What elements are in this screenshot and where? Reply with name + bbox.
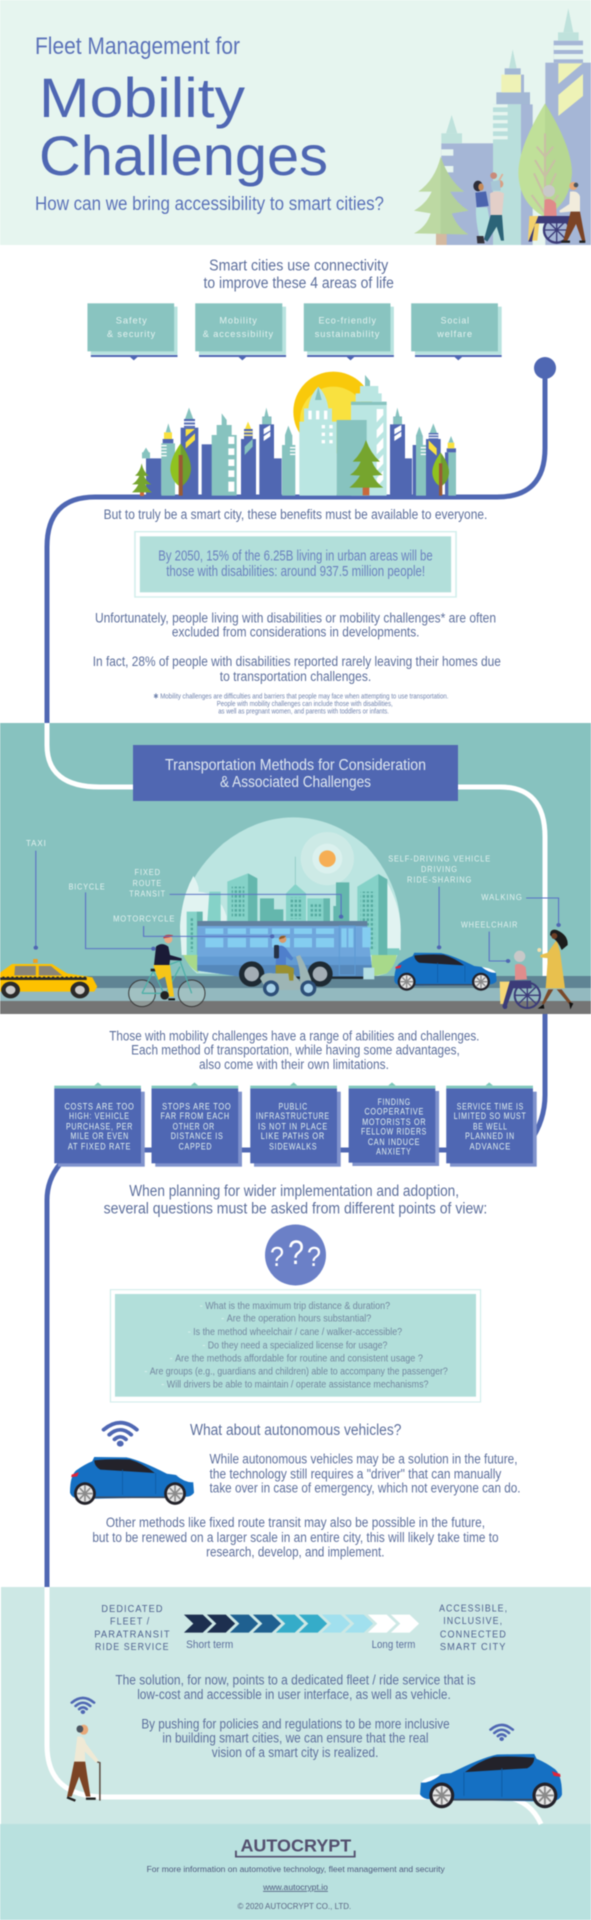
callout: 2050 statistic: By 2050, 15% of the 6.25B living in urban areas will be (158, 548, 433, 564)
text: exclusion paragraphs: to transportation challenges. (220, 670, 371, 685)
chart labels: transport method leaders (26, 839, 561, 963)
logo: AUTOCRYPT (240, 1835, 352, 1855)
label: taxi: TAXI (26, 839, 47, 848)
paragraph: other methods: research, develop, and implement. (206, 1545, 384, 1560)
card: infrastructure: LIKE PATHS OR (261, 1132, 325, 1142)
card: mobility and accessibility: Mobility (219, 316, 258, 326)
card: infrastructure: INFRASTRUCTURE (256, 1112, 330, 1122)
icon: question marks circle (265, 1224, 326, 1286)
paragraph: other methods (92, 1516, 499, 1560)
card: costs: COSTS ARE TOO (64, 1102, 135, 1112)
text: exclusion paragraphs (93, 611, 501, 685)
label: fixed route transit: FIXED (135, 868, 161, 877)
heading: planning questions: When planning for wider implementation and adoption, (129, 1183, 459, 1200)
text: abilities and limitations: Each method of transportation, while having some advantages, (131, 1043, 460, 1058)
card: eco-friendly sustainability: sustainability (315, 330, 380, 340)
tree: small pine (132, 463, 152, 496)
panel: transportation background (0, 723, 591, 1014)
person: woman (473, 181, 491, 243)
text: solution paragraphs: By pushing for policies and regulations to be more inclusive (141, 1717, 450, 1732)
heading: planning questions (104, 1183, 487, 1217)
road bands (0, 976, 591, 1014)
person: woman in wheelchair (528, 185, 570, 243)
tree: leaf tree right (432, 452, 449, 496)
icon: question marks circle: ? (288, 1234, 304, 1272)
axis labels: Short term (186, 1640, 233, 1651)
card: service time: LIMITED SO MUST (454, 1112, 527, 1122)
route line: blue upper section with start dot (47, 357, 556, 723)
label: smart city (439, 1604, 508, 1653)
panel: solution background (1, 1587, 591, 1824)
card: safety and security: & security (107, 330, 156, 340)
card: service time: ADVANCE (470, 1142, 511, 1152)
copyright: © 2020 AUTOCRYPT CO., LTD. (237, 1902, 351, 1911)
panel: question list: - Is the method wheelchair / cane / walker-accessible? (188, 1327, 402, 1338)
text: solution paragraphs (115, 1673, 476, 1761)
heading: transportation methods banner: Transportation Methods for Consideration (165, 757, 426, 774)
panel: four areas of life (87, 303, 502, 360)
illustration: taxi (0, 959, 97, 998)
label: dedicated fleet: FLEET / (110, 1617, 150, 1627)
card: eco-friendly sustainability: Eco-friendly (318, 316, 377, 326)
card: costs: PURCHASE, PER (66, 1122, 133, 1132)
illustration: elderly man with cane and wifi (67, 1698, 100, 1801)
heading: planning questions: several questions must be asked from different points of view: (104, 1200, 487, 1217)
label: fixed route transit (129, 868, 343, 919)
label: wheelchair (461, 920, 518, 963)
card: social welfare: welfare (436, 330, 473, 340)
panel: question list: - What is the maximum trip distance & duration? (200, 1301, 390, 1312)
paragraph: driver requirement: the technology still requires a "driver" that can manually (210, 1467, 502, 1482)
header title block (35, 33, 384, 215)
footer: logo and contact (147, 1835, 445, 1911)
callout: 2050 statistic (135, 532, 456, 597)
card: stops: CAPPED (179, 1142, 212, 1152)
card: costs (54, 1082, 145, 1167)
card: anxiety: COOPERATIVE (364, 1107, 424, 1117)
illustration: autonomous car (70, 1457, 194, 1505)
bus (197, 921, 374, 987)
card: safety and security (87, 303, 178, 360)
label: dedicated fleet: PARATRANSIT (94, 1630, 171, 1640)
text: intro heading: Smart cities use connectivity (209, 258, 389, 274)
text: solution paragraphs: vision of a smart city is realized. (212, 1746, 378, 1761)
person: man carrying child (484, 172, 504, 242)
text: autonomous vehicles section (92, 1422, 520, 1560)
person: elderly man pushing (559, 182, 585, 242)
paragraph: driver requirement (210, 1452, 520, 1496)
card: anxiety: FELLOW RIDERS (361, 1127, 427, 1137)
title (39, 66, 328, 187)
label: smart city: CONNECTED (440, 1630, 507, 1640)
chevrons (184, 1615, 419, 1633)
card: service time: SERVICE TIME IS (457, 1102, 524, 1112)
heading: transportation methods banner: & Associated Challenges (220, 774, 371, 791)
callout: 2050 statistic: those with disabilities: around 937.5 million people! (166, 564, 425, 580)
label: self-driving, driving, ride-sharing (388, 854, 491, 949)
card: service time: PLANNED IN (465, 1132, 515, 1142)
card: anxiety (349, 1082, 439, 1166)
bicycle with rider (129, 935, 205, 1007)
label: fixed route transit: TRANSIT (129, 889, 166, 898)
card: costs: MILE OR EVEN (70, 1132, 129, 1142)
chart: timeline from dedicated fleet to smart city (94, 1604, 508, 1653)
text: abilities and limitations: Those with mobility challenges have a range of abilities and challenges. (109, 1029, 479, 1044)
text: solution paragraphs: in building smart cities, we can ensure that the real (162, 1731, 429, 1746)
panel: header background (0, 0, 591, 245)
axis labels: Long term (372, 1640, 415, 1651)
text: intro heading: to improve these 4 areas of life (204, 275, 394, 292)
card: social welfare (411, 303, 502, 360)
tagline: For more information on automotive technology, fleet management and security (147, 1865, 445, 1874)
icon: question marks circle: ? (270, 1241, 284, 1272)
card: infrastructure: IS NOT IN PLACE (258, 1122, 328, 1132)
panel: question list: - Are groups (e.g., guardians and children) able to accompany the passenger? (144, 1366, 448, 1377)
label: taxi (26, 839, 47, 950)
label: walking (481, 893, 561, 927)
illustration: smart city skyline (132, 372, 456, 496)
card: eco-friendly sustainability (304, 303, 394, 360)
label: smart city: INCLUSIVE, (443, 1617, 503, 1627)
tree: leaf tree left (170, 443, 191, 496)
card: stops: FAR FROM EACH (161, 1112, 230, 1122)
card: infrastructure (250, 1082, 341, 1167)
label: smart city: SMART CITY (440, 1643, 507, 1653)
card: anxiety: CAN INDUCE (368, 1138, 420, 1148)
wheelchair user (500, 951, 540, 1009)
text: solution paragraphs: low-cost and accessible in user interface, as well as vehicle. (137, 1688, 451, 1703)
label: self-driving, driving, ride-sharing: RIDE-SHARING (407, 875, 472, 884)
route line: blue middle section (47, 1014, 545, 1587)
text: abilities and limitations: also come with their own limitations. (199, 1058, 389, 1073)
illustration: city dome with bus (180, 817, 401, 978)
card: service time (446, 1082, 537, 1167)
label: self-driving, driving, ride-sharing: SELF-DRIVING VEHICLE (388, 854, 491, 864)
panel: limitation cards (54, 1082, 537, 1167)
panel: question list: - Are the operation hours substantial? (221, 1313, 371, 1324)
icon: wifi above autonomous car (104, 1423, 137, 1447)
panel: question list (110, 1290, 481, 1402)
paragraph: other methods: Other methods like fixed route transit may also be possible in the future, (106, 1516, 485, 1531)
label: bicycle (69, 882, 156, 951)
card: stops: STOPS ARE TOO (162, 1102, 231, 1112)
card: costs: AT FIXED RATE (68, 1142, 131, 1152)
card: service time: BE WELL (473, 1122, 508, 1132)
card: mobility and accessibility: & accessibility (203, 330, 274, 340)
card: infrastructure: PUBLIC (279, 1102, 308, 1112)
link: www.autocrypt.io (262, 1883, 328, 1892)
panel: question list: - Do they need a specialized license for usage? (202, 1340, 387, 1351)
text: footnote: as well as pregnant women, and parents with toddlers or infants. (218, 707, 389, 715)
label: fixed route transit: ROUTE (133, 879, 162, 888)
illustration: car at end of route (420, 1754, 562, 1808)
card: stops: DISTANCE IS (171, 1132, 224, 1142)
walking woman (537, 930, 573, 1009)
label: smart city: ACCESSIBLE, (439, 1604, 508, 1614)
label: dedicated fleet (94, 1605, 171, 1653)
text: footnote: People with mobility challenges can include those with disabilities, (217, 699, 393, 708)
scooter with rider (260, 936, 316, 996)
heading: What about autonomous vehicles? (190, 1422, 401, 1439)
card: stops: OTHER OR (173, 1122, 215, 1132)
card: mobility and accessibility (195, 303, 286, 360)
text: availability statement: But to truly be a smart city, these benefits must be available to everyone. (104, 508, 487, 523)
card: anxiety: MOTORISTS OR (362, 1118, 426, 1128)
label: dedicated fleet: RIDE SERVICE (95, 1643, 170, 1653)
illustration: wheelchair user and walking woman (500, 930, 573, 1009)
subtitle: How can we bring accessibility to smart cities? (35, 194, 384, 215)
card: anxiety: FINDING (378, 1098, 411, 1108)
card: anxiety: ANXIETY (376, 1147, 412, 1157)
label: bicycle: BICYCLE (69, 882, 106, 892)
panel: question list: - Are the methods affordable for routine and consistent usage ? (170, 1353, 423, 1364)
illustration: blue car on road (394, 953, 497, 991)
label: dedicated fleet: DEDICATED (101, 1605, 164, 1615)
icon: wifi above right car (491, 1725, 513, 1741)
label: motorcycle (113, 914, 274, 938)
heading: transportation methods banner (133, 745, 458, 801)
label: motorcycle: MOTORCYCLE (113, 914, 175, 924)
kicker: Fleet Management for (35, 33, 240, 60)
axis labels (186, 1640, 415, 1651)
panel: question list: - Will drivers be able to maintain / operate assistance mechanisms? (161, 1379, 429, 1390)
label: self-driving, driving, ride-sharing: DRIVING (421, 865, 458, 874)
title: Challenges (39, 124, 328, 187)
card: stops (152, 1082, 242, 1167)
text: solution paragraphs: The solution, for now, points to a dedicated fleet / ride service that is (115, 1673, 476, 1688)
card: infrastructure: SIDEWALKS (269, 1142, 317, 1152)
card: social welfare: Social (441, 316, 470, 326)
icon: question marks circle: ? (307, 1241, 321, 1272)
label: walking: WALKING (481, 893, 523, 902)
text: intro heading (204, 258, 394, 292)
label: wheelchair: WHEELCHAIR (461, 920, 518, 929)
tree: big pine (349, 440, 383, 495)
route line: white lower section (47, 1587, 541, 1824)
text: exclusion paragraphs: excluded from considerations in developments. (172, 625, 419, 640)
illustration: city and people in header (414, 8, 591, 245)
text: footnote (153, 692, 449, 715)
card: safety and security: Safety (116, 316, 148, 326)
text: footnote: ✱ Mobility challenges are difficulties and barriers that people may face when attempting to use transportation. (153, 692, 449, 701)
text: abilities and limitations (109, 1029, 479, 1073)
route line: white section in transport panel (47, 723, 545, 976)
card: costs: HIGH: VEHICLE (69, 1112, 130, 1122)
panel: footer background (0, 1824, 591, 1920)
illustration: bus, scooter and cyclist (129, 921, 374, 1007)
title: Mobility (39, 66, 245, 129)
